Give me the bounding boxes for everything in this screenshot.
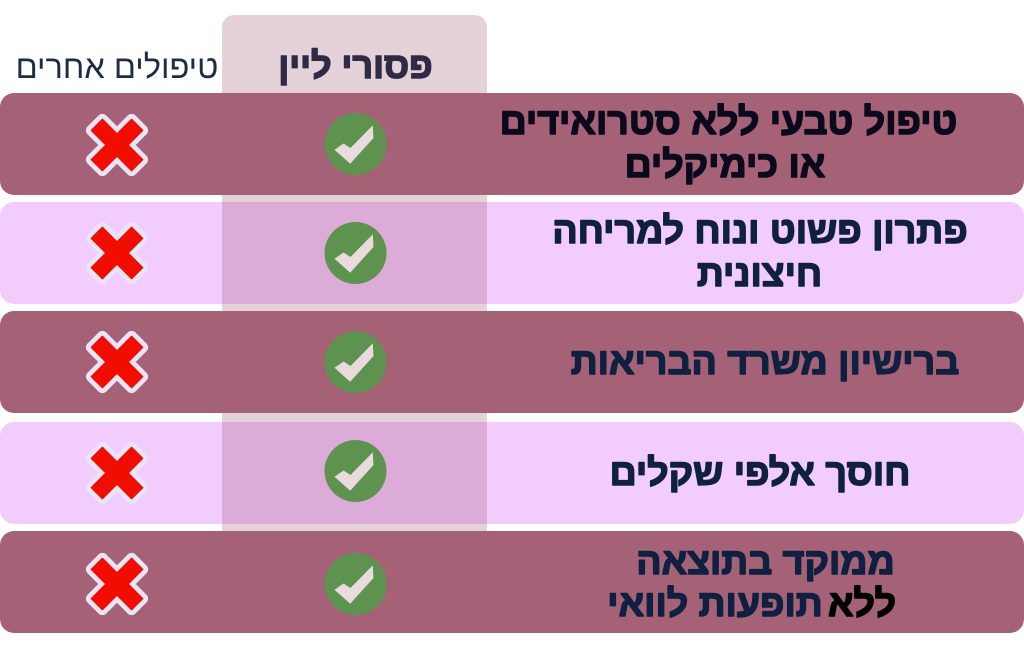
row 5 cross icon (91, 558, 143, 610)
highlighted column: Psori Line (222, 15, 487, 540)
row 4 text: חוסך אלפי שקלים (610, 451, 910, 493)
row 3 check icon (324, 331, 386, 393)
row 5 text: ללא (828, 582, 896, 624)
row 1 cross icon (91, 119, 143, 171)
row 2 text: פתרון פשוט ונוח למריחה (552, 209, 968, 251)
row 4 check icon (324, 440, 386, 502)
row 2: simple solution (0, 202, 1024, 304)
header: other treatments: טיפולים אחרים (16, 48, 218, 85)
row 5 text (607, 540, 896, 624)
row 1 check icon (324, 113, 386, 175)
row 1 text: או כימיקלים (625, 143, 825, 185)
row 3: health ministry licence (0, 311, 1024, 413)
row 2 check icon (324, 222, 386, 284)
row 5: focused on results (0, 531, 1024, 633)
row 3 cross icon (91, 336, 143, 388)
row 4 cross icon (91, 447, 143, 499)
header: Psori Line: פסורי ליין (278, 45, 433, 86)
row 4: saves money (0, 422, 1024, 524)
row 5 check icon (324, 553, 386, 615)
row 5 text: תופעות לוואי (607, 582, 823, 624)
row 2 text: חיצונית (697, 252, 822, 294)
row 2 cross icon (91, 227, 143, 279)
row 3 text: ברישיון משרד הבריאות (571, 340, 959, 382)
row 5 text: ממוקד בתוצאה (636, 540, 895, 582)
row 1 text: טיפול טבעי ללא סטרואידים (500, 100, 957, 142)
row 1: natural treatment (0, 93, 1024, 195)
